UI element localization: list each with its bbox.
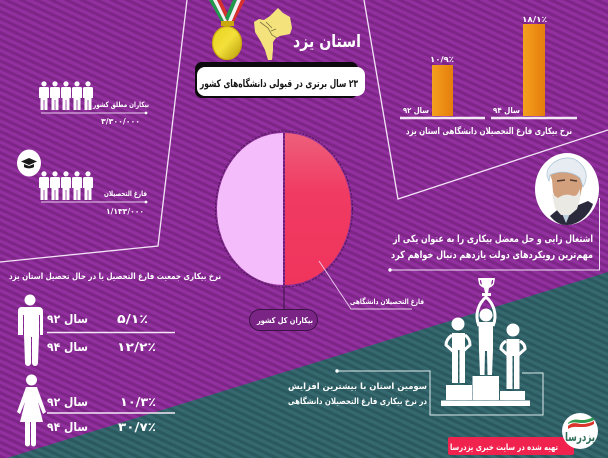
bar: year 92: سال ۹۲ [403,106,429,115]
icon: five graduates [39,171,93,200]
callout: third province: در نرخ بیکاری فارغ التحصیلان دانشگاهی [288,396,428,407]
icon: graduation cap [17,150,41,176]
callout: university graduates [319,261,424,309]
pie chart [216,131,352,287]
women stats: سال ۹۲ [47,395,88,409]
bar: year 94 [491,15,577,118]
icon: man [18,294,43,366]
women stats: ۳۰/۷٪ [118,420,156,434]
women stats: سال ۹۴ [47,420,88,434]
icon: map of Yazd province [254,8,292,60]
bar: year 92 [400,55,485,118]
men stats: سال ۹۲ [47,312,88,326]
women stats: ۱۰/۳٪ [120,395,156,409]
callout: country unemployed [250,287,318,330]
winner [477,297,495,326]
stat: graduates: ۱/۱۳۳/۰۰۰ [106,207,144,216]
stat: graduates [39,171,147,216]
stat: graduates: فارغ التحصیلان [104,189,147,198]
subtitle banner [195,62,365,98]
stat: total unemployed: ۳/۳۰۰/۰۰۰ [101,117,140,126]
men stats: ۵/۱٪ [117,312,148,326]
footer credit [448,437,574,455]
frame line: top left panel [0,0,187,262]
callout: third province: سومین استان با بیشترین افزایش [288,382,427,392]
teal diagonal band [7,272,608,458]
logo [562,413,598,449]
icon: woman [17,374,46,446]
callout: third province [288,369,543,415]
second place [446,318,470,383]
bar: year 94: ۱۸/۱٪ [522,15,547,24]
icon: gold medal [209,0,245,60]
callout: university graduates: فارغ التحصیلان دانشگاهی [350,297,424,306]
women stats [17,374,175,446]
bar: year 94: سال ۹۴ [493,106,520,115]
callout: country unemployed: بیکاران کل کشور [256,316,313,325]
bar: year 92: ۱۰/۹٪ [430,55,454,64]
subtitle banner: ۲۳ سال برتری در قبولی دانشگاه‌های کشور [199,77,358,90]
podium blocks [446,385,472,400]
title: استان یزد [293,32,361,52]
section heading: student unemployment: نرخ بیکاری جمعیت فارغ التحصیل یا در حال تحصیل استان یزد [9,272,221,282]
logo: یزدرسا [565,430,595,444]
icon: five people [39,81,93,110]
footer credit: تهیه شده در سایت خبری یزدرسا [450,443,558,453]
men stats [18,294,175,366]
stat: total unemployed: بیکاران مطلق کشور [92,100,149,109]
trophy [478,278,495,296]
quote [388,198,600,272]
frame line: top right panel [364,0,608,199]
men stats: ۱۲/۲٪ [117,340,156,354]
icon: podium with trophy winners [441,278,530,406]
stat: total unemployed [39,81,149,126]
portrait [535,153,599,225]
bar chart: graduate unemployment in Yazd [400,15,577,137]
third place [501,324,525,389]
men stats: سال ۹۴ [47,340,88,354]
